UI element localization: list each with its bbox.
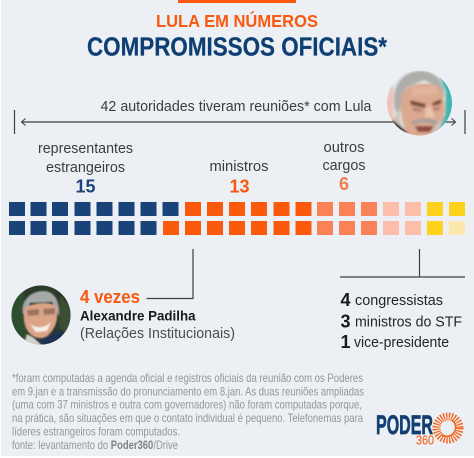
list: outros cargos breakdown: vice-presidente	[354, 334, 449, 351]
title: LULA EM NÚMEROS	[156, 10, 318, 31]
footnote and source: fonte: levantamento do Poder360/Drive	[12, 438, 178, 452]
connector: outros cargos to list	[340, 249, 465, 277]
title	[87, 10, 387, 62]
list: outros cargos breakdown: ministros do STF	[355, 314, 462, 330]
callout: Alexandre Padilha 4 vezes: (Relações Institucionais)	[80, 326, 235, 342]
unit chart: 42 squares	[9, 202, 465, 235]
category label: outros cargos 6: cargos	[322, 157, 366, 174]
footnote and source: líderes estrangeiros foram computados.	[12, 424, 180, 438]
callout: Alexandre Padilha 4 vezes: 4 vezes	[80, 287, 140, 307]
category label: ministros 13: 13	[230, 176, 250, 196]
list: outros cargos breakdown: 3	[340, 312, 351, 332]
category label: representantes estrangeiros 15	[38, 140, 133, 196]
footnote and source: *foram computadas a agenda oficial e registros oficiais da reunião com os Poderes	[12, 371, 363, 385]
list: outros cargos breakdown: 4	[340, 290, 351, 310]
category label: representantes estrangeiros 15: representantes	[38, 140, 133, 157]
category label: outros cargos 6: outros	[324, 139, 364, 156]
list: outros cargos breakdown: 1	[340, 332, 351, 352]
category label: outros cargos 6	[322, 139, 366, 194]
connector: ministros to Padilha	[146, 249, 193, 298]
category label: ministros 13: ministros	[210, 158, 268, 175]
category label: representantes estrangeiros 15: 15	[76, 176, 96, 196]
footnote and source	[12, 371, 364, 452]
total span arrow: 42 autoridades	[14, 98, 465, 134]
footnote and source: (uma com 37 ministros e outra com governadores) não foram computadas porque,	[12, 398, 362, 412]
list: outros cargos breakdown	[340, 290, 462, 352]
category label: ministros 13	[210, 158, 268, 196]
logo: Poder360: 360	[416, 434, 434, 448]
photo: Lula	[387, 70, 452, 136]
footnote and source: em 9.jan e a transmissão do pronunciamento em 8.jan. As duas reuniões ampliadas	[12, 384, 364, 398]
logo: Poder360: PODER	[376, 410, 433, 440]
photo: Alexandre Padilha	[10, 284, 72, 346]
callout: Alexandre Padilha 4 vezes: Alexandre Padilha	[80, 308, 196, 324]
title: COMPROMISSOS OFICIAIS*	[87, 34, 387, 62]
category label: representantes estrangeiros 15: estrangeiros	[46, 159, 125, 176]
total span arrow: 42 autoridades: 42 autoridades tiveram reuniões* com Lula	[100, 98, 372, 115]
callout: Alexandre Padilha 4 vezes	[80, 287, 235, 342]
top accent bar	[178, 0, 296, 3]
list: outros cargos breakdown: congressistas	[355, 292, 443, 309]
category label: outros cargos 6: 6	[339, 174, 349, 194]
footnote and source: na prática, são situações em que o contato individual é pequeno. Telefonemas para	[12, 411, 363, 425]
